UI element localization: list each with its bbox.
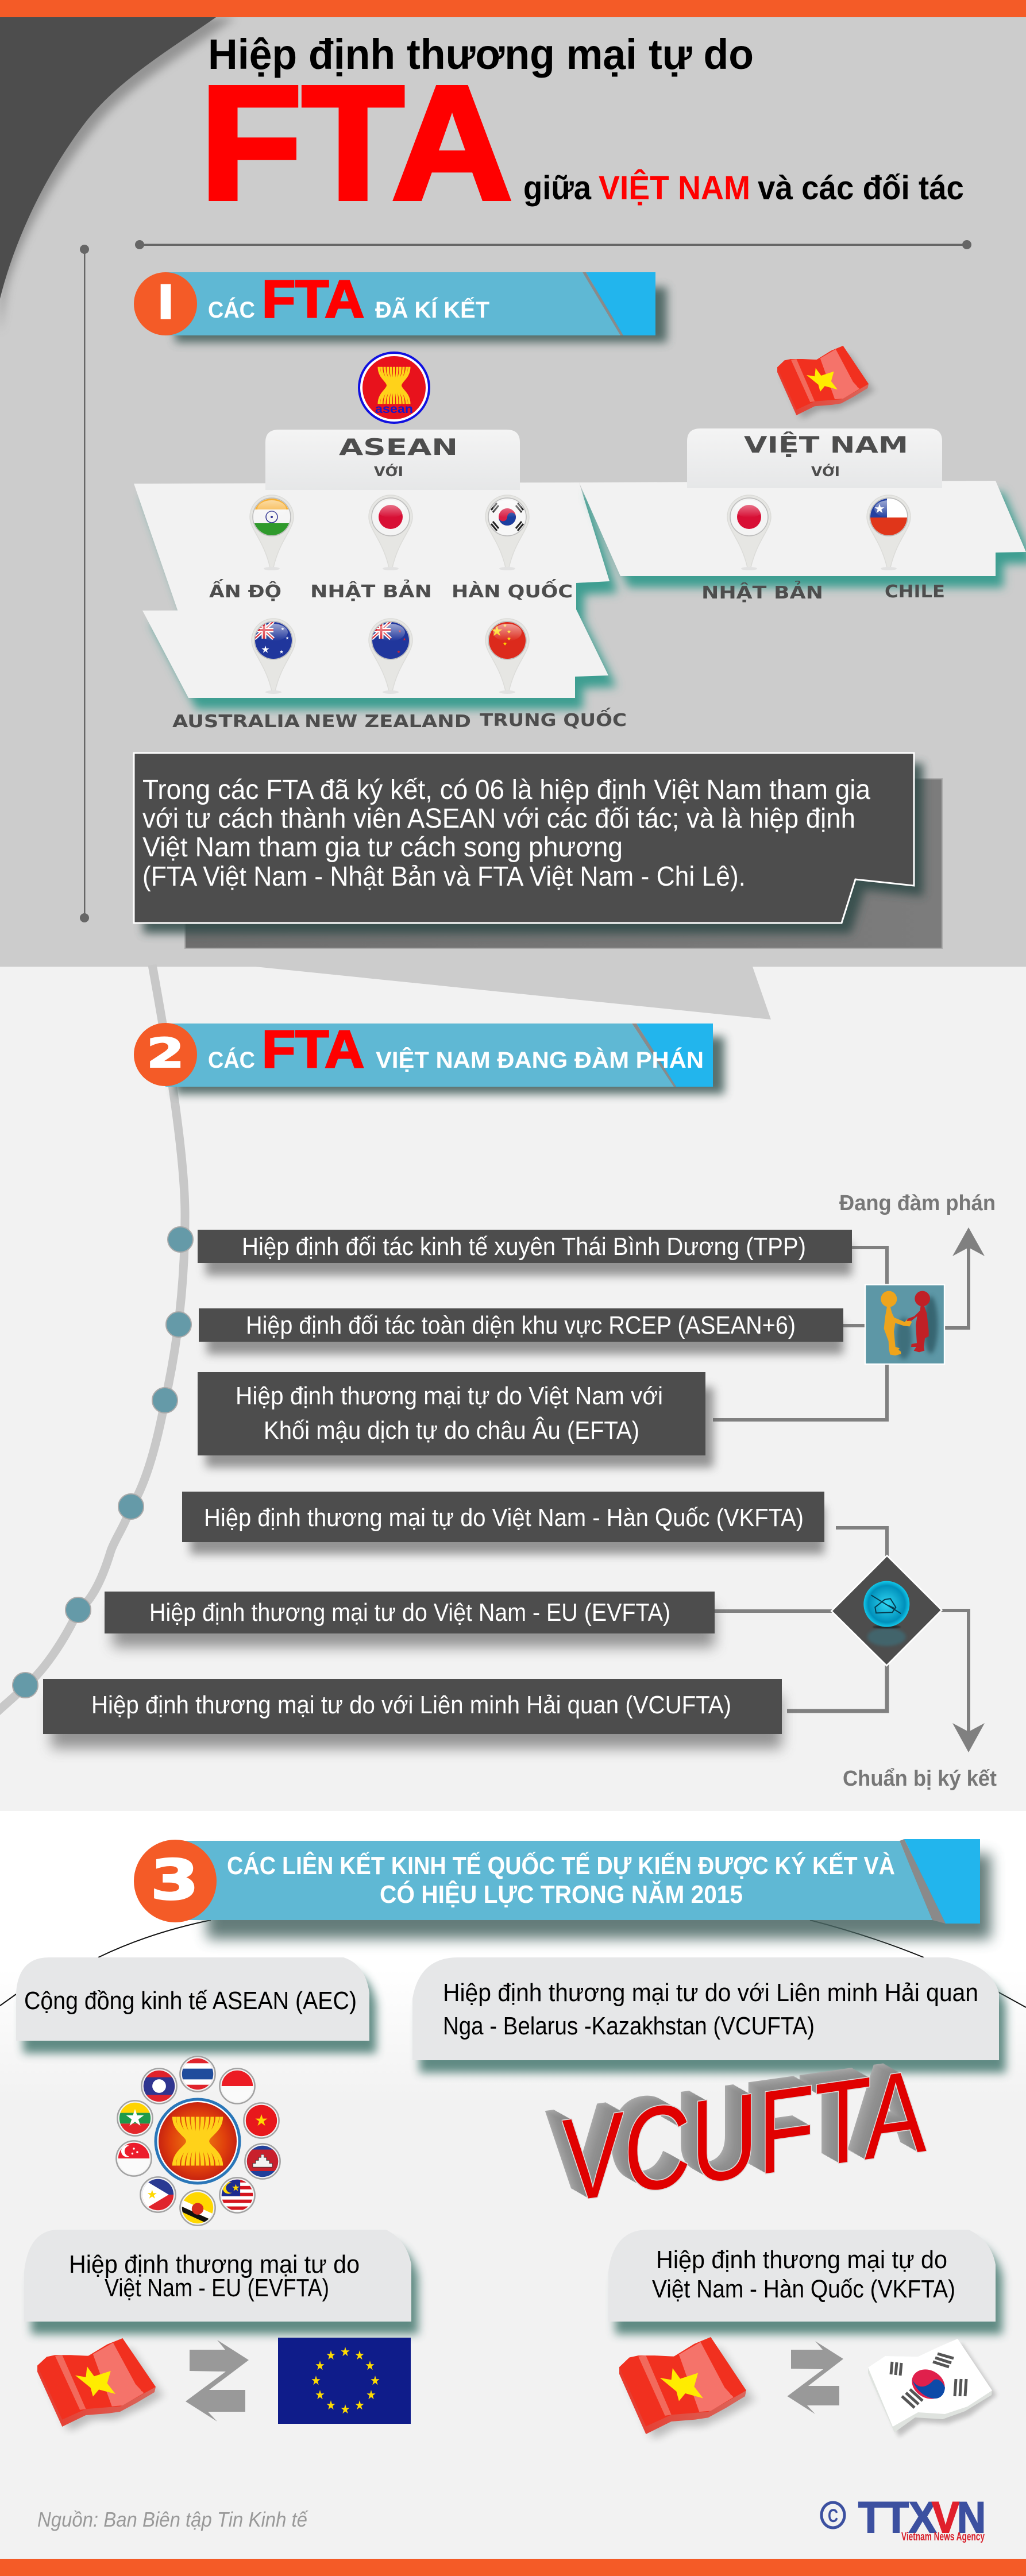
- banner 1 text: ĐÃ KÍ KẾT: [375, 296, 489, 323]
- EVFTA line 1: Hiệp định thương mại tư do: [69, 2250, 360, 2278]
- label: Nhật Bản (Vietnam): NHẬT BẢN: [701, 581, 823, 603]
- label: Trung Quốc: TRUNG QUỐC: [480, 707, 627, 731]
- label: Đang đàm phán: Đang đàm phán: [839, 1191, 996, 1215]
- connectors: preparing: [715, 1528, 969, 1732]
- title FTA: FTA: [200, 52, 512, 233]
- EVFTA line 2: Việt Nam - EU (EVFTA): [105, 2274, 329, 2302]
- pin: New Zealand: [369, 619, 412, 694]
- bar: EVFTA: [105, 1592, 715, 1647]
- decorative circle arcs: [0, 1920, 1026, 2007]
- ASEAN VỚI: VỚI: [374, 464, 403, 480]
- bar: TPP: [198, 1230, 852, 1276]
- VIỆT NAM heading: VIỆT NAM: [744, 431, 908, 458]
- flag: Brunei: [180, 2190, 215, 2226]
- agency name: Vietnam News Agency: [901, 2531, 985, 2543]
- icon: Vietnam flag right: [619, 2337, 754, 2440]
- banner 3 line 1: CÁC LIÊN KẾT KINH TẾ QUỐC TẾ DỰ KIẾN ĐƯỢC KÝ KẾT VÀ: [227, 1851, 895, 1880]
- flag: Laos: [141, 2068, 177, 2104]
- title VIỆT NAM: VIỆT NAM: [599, 169, 750, 207]
- N letter: N: [957, 2493, 986, 2542]
- panel: EVFTA: [24, 2230, 418, 2334]
- label: Nhật Bản: NHẬT BẢN: [310, 580, 432, 602]
- VCUFTA panel line 2: Nga - Belarus -Kazakhstan (VCUFTA): [443, 2012, 815, 2040]
- icon: Vietnam flag left: [37, 2338, 163, 2432]
- pin: Japan: [369, 495, 412, 570]
- tab: ASEAN: [265, 430, 520, 490]
- background: section 2 light: [0, 967, 1026, 1811]
- banner 2: [134, 1020, 724, 1094]
- top orange bar: [0, 0, 1026, 17]
- dot 6: [13, 1673, 38, 1698]
- flag: Philippines: [140, 2177, 176, 2212]
- bar: VKFTA: [182, 1492, 824, 1554]
- pin: Korea: [485, 495, 529, 570]
- flag: Myanmar: [117, 2100, 153, 2136]
- banner 2 CÁC: CÁC: [208, 1047, 255, 1073]
- banner 1: [134, 270, 667, 342]
- source note: Nguồn: Ban Biên tập Tin Kinh tế: [37, 2508, 309, 2531]
- bar: RCEP: [199, 1308, 843, 1354]
- bar: EFTA: [198, 1372, 713, 1467]
- bar: VKFTA: Hiệp định thương mại tự do Việt Nam - Hàn Quốc (VKFTA): [204, 1504, 804, 1532]
- background: section 1 grey: [0, 0, 1026, 967]
- pin: India: [250, 495, 294, 570]
- ASEAN heading: ASEAN: [339, 435, 458, 461]
- title line 2 start: giữa: [523, 169, 592, 207]
- bar: RCEP: Hiệp định đối tác toàn diện khu vực RCEP (ASEAN+6): [246, 1311, 796, 1339]
- numeral 2: 2: [146, 1030, 184, 1077]
- tab: VIỆT NAM: [687, 428, 942, 488]
- vertical rule: [80, 245, 89, 922]
- label: Chile: CHILE: [885, 582, 945, 602]
- icon: Korea flag: [868, 2339, 997, 2437]
- arrow down: [952, 1723, 985, 1752]
- label: Hàn Quốc: HÀN QUỐC: [452, 578, 573, 602]
- icon: signing diamond: [831, 1555, 942, 1666]
- figure red: [907, 1291, 930, 1352]
- numeral 1: I: [160, 276, 172, 327]
- V letter: V: [932, 2493, 959, 2542]
- panel: Vietnam partner card: [579, 481, 1026, 588]
- callout back panel: [185, 779, 942, 948]
- flag: Cambodia: [245, 2144, 280, 2179]
- banner 1 FTA: FTA: [262, 270, 364, 329]
- panel: VKFTA: [608, 2230, 1002, 2334]
- dot 5: [65, 1597, 91, 1623]
- flag: Singapore: [116, 2141, 152, 2176]
- card row 1: [134, 482, 610, 612]
- flag: Malaysia: [219, 2177, 255, 2213]
- banner 1 number: [134, 272, 197, 335]
- VCUFTA panel line 1: Hiệp định thương mại tư do với Liên minh Hải quan: [443, 1979, 978, 2007]
- horizontal rule: [135, 240, 971, 249]
- label: Chuẩn bị ký kết: Chuẩn bị ký kết: [843, 1767, 997, 1791]
- bottom orange bar: [0, 2559, 1026, 2576]
- flag: Vietnam: [244, 2103, 279, 2138]
- VIỆT NAM VỚI: VỚI: [811, 464, 840, 480]
- card row 2: [142, 609, 608, 698]
- label: Ấn Độ: ẤN ĐỘ: [209, 578, 281, 602]
- pin: Japan (Vietnam): [727, 495, 771, 570]
- pin: China: [485, 619, 529, 694]
- panel: AEC: Cộng đồng kinh tế ASEAN (AEC): [24, 1987, 357, 2015]
- ASEAN flag ring: [116, 2056, 280, 2226]
- central emblem: [156, 2099, 240, 2183]
- connectors: negotiating: [713, 1246, 969, 1420]
- callout line 3: Việt Nam tham gia tư cách song phương: [142, 832, 623, 863]
- dot 3: [152, 1388, 178, 1413]
- icon: ASEAN emblem: [358, 352, 430, 424]
- copyright symbol: C: [828, 2505, 838, 2526]
- callout line 4: (FTA Việt Nam - Nhật Bản và FTA Việt Nam - Chi Lê).: [142, 862, 746, 892]
- dark corner curve: [0, 17, 236, 333]
- section 1 pointer notch: [255, 967, 771, 1019]
- arrows: exchange right: [787, 2341, 843, 2414]
- dot 1: [168, 1227, 193, 1252]
- title line 2 end: và các đối tác: [758, 169, 964, 207]
- callout line 2: với tư cách thành viên ASEAN với các đối tác; và là hiệp định: [142, 804, 855, 834]
- VCUFTA 3D title: VCUFTA: [562, 2044, 927, 2227]
- dot 2: [166, 1312, 191, 1337]
- bar: EVFTA: Hiệp định thương mại tư do Việt Nam - EU (EVFTA): [149, 1598, 670, 1627]
- icon: Vietnam flag: [777, 346, 874, 419]
- banner 1 CÁC: CÁC: [208, 297, 255, 323]
- numeral 3: 3: [151, 1849, 199, 1912]
- callout line 1: Trong các FTA đã ký kết, có 06 là hiệp định Việt Nam tham gia: [142, 775, 870, 805]
- background: section 3: [0, 1811, 1026, 2576]
- icon: ASEAN emblem: asean: [375, 403, 413, 416]
- flag: Thailand: [180, 2056, 215, 2092]
- figure orange: [881, 1291, 912, 1355]
- VKFTA line 1: Hiệp định thương mại tự do: [656, 2246, 947, 2274]
- EFTA line 1: Hiệp định thương mại tự do Việt Nam với: [236, 1382, 663, 1410]
- VKFTA line 2: Việt Nam - Hàn Quốc (VKFTA): [652, 2275, 955, 2303]
- panel: VCUFTA: [412, 1957, 1006, 2073]
- section 3 white gradient: [0, 1811, 1026, 2098]
- label: Australia: AUSTRALIA: [172, 712, 300, 732]
- banner 2 number: [134, 1023, 197, 1086]
- flag: Indonesia: [219, 2068, 255, 2104]
- label: New Zealand: NEW ZEALAND: [304, 712, 471, 732]
- logo: TTXVN: [821, 2493, 986, 2543]
- banner 2 FTA: FTA: [262, 1020, 364, 1079]
- arrows: exchange left: [186, 2340, 249, 2421]
- banner 3 number: [134, 1840, 217, 1922]
- icon: EU flag: [278, 2338, 411, 2424]
- dot 4: [118, 1494, 144, 1519]
- title: [200, 30, 964, 233]
- bar: TPP: Hiệp định đối tác kinh tế xuyên Thái Bình Dương (TPP): [242, 1233, 806, 1261]
- banner 2 text: VIỆT NAM ĐANG ĐÀM PHÁN: [376, 1046, 704, 1073]
- arrow up: [952, 1227, 985, 1256]
- icon: handshake: [865, 1285, 944, 1364]
- panel: ASEAN partner cards: [134, 482, 618, 709]
- panel: AEC: [16, 1957, 376, 2053]
- callout: [134, 753, 923, 933]
- pin: Australia: [252, 619, 295, 694]
- banner 3: [134, 1839, 991, 1939]
- title line 1: Hiệp định thương mại tự do: [208, 30, 754, 78]
- bar: VCUFTA: Hiệp định thương mại tư do với Liên minh Hải quan (VCUFTA): [91, 1691, 731, 1719]
- bar: VCUFTA: [43, 1679, 782, 1748]
- pin: Chile: [867, 495, 911, 570]
- EFTA line 2: Khối mậu dịch tự do châu Âu (EFTA): [264, 1416, 639, 1445]
- copyright symbol: [821, 2502, 844, 2528]
- TTX letters: TTX: [858, 2493, 936, 2542]
- timeline curve: [0, 965, 185, 1714]
- banner 3 line 2: CÓ HIỆU LỰC TRONG NĂM 2015: [380, 1880, 743, 1909]
